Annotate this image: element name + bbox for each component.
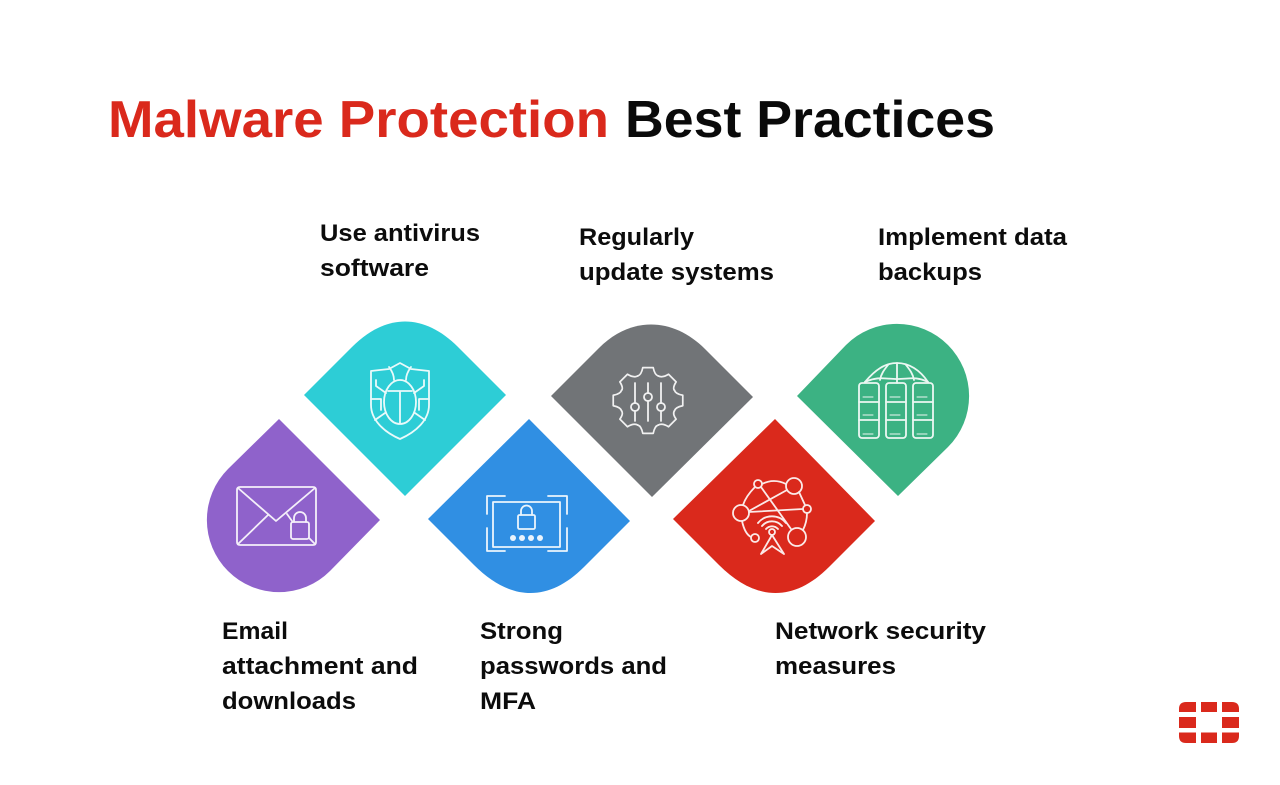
icon: globe over servers <box>859 363 933 438</box>
panel: regularly update systems <box>551 224 774 497</box>
shape: gray diamond <box>551 324 753 497</box>
label <box>480 618 667 715</box>
label: Regularly <box>579 224 694 251</box>
label: Network security <box>775 618 986 645</box>
title <box>108 91 995 149</box>
label: backups <box>878 259 982 286</box>
label <box>320 220 480 282</box>
label: downloads <box>222 688 356 715</box>
panel: implement data backups <box>797 224 1067 496</box>
label <box>878 224 1067 286</box>
panel: strong passwords and MFA <box>428 419 667 715</box>
label: passwords and <box>480 653 667 680</box>
icon: shield with bug <box>371 363 429 439</box>
title: Malware Protection <box>108 91 609 149</box>
shape: purple teardrop <box>207 419 380 592</box>
label: Email <box>222 618 288 645</box>
panel: email attachment and downloads <box>207 419 418 715</box>
shape: red diamond <box>673 419 875 593</box>
icon: network with antenna <box>733 478 811 554</box>
label: attachment and <box>222 653 418 680</box>
label <box>579 224 774 286</box>
label: Implement data <box>878 224 1067 251</box>
label: software <box>320 255 429 282</box>
shape: blue diamond <box>428 419 630 593</box>
logo: red grid mark <box>1179 702 1239 743</box>
icon: envelope with lock <box>237 487 316 545</box>
label <box>222 618 418 715</box>
title: Best Practices <box>625 91 995 149</box>
label: Strong <box>480 618 563 645</box>
label: update systems <box>579 259 774 286</box>
panel: use antivirus software <box>304 220 506 496</box>
icon: password lock screen <box>487 496 567 551</box>
panel: network security measures <box>673 419 986 680</box>
label <box>775 618 986 680</box>
shape: teal diamond <box>304 322 506 496</box>
shape: green teardrop <box>797 324 969 496</box>
label: Use antivirus <box>320 220 480 247</box>
label: MFA <box>480 688 536 715</box>
label: measures <box>775 653 896 680</box>
icon: gear with sliders <box>613 368 683 433</box>
